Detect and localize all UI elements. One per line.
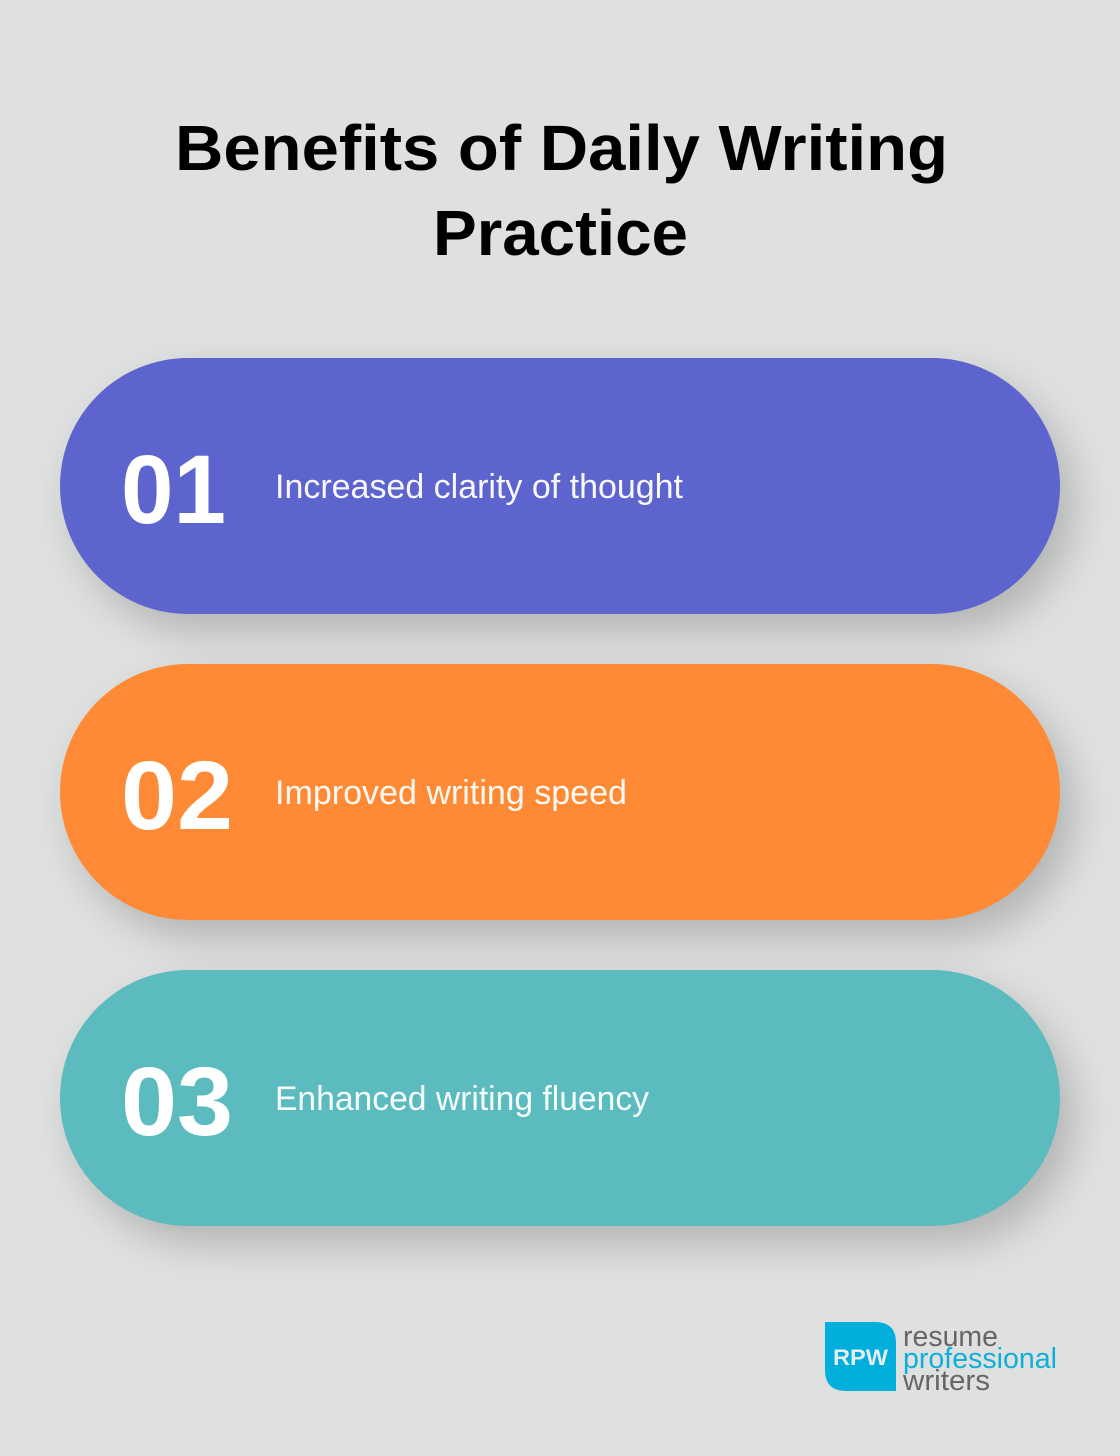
title: Practice [433,197,688,269]
logo: resume professional writers [825,1321,1057,1397]
logo word: writers: writers [902,1365,990,1397]
logo word: professional: professional [903,1343,1057,1375]
benefit 02 text: Improved writing speed [275,774,627,812]
panel: benefit 02 [60,664,1060,920]
logo word: resume: resume [903,1321,998,1353]
panel: benefit 01 [60,358,1060,614]
title: Benefits of Daily Writing [175,112,948,184]
benefit 03 number: 03 [121,1047,233,1156]
logo initials: RPW [833,1345,888,1370]
title [175,112,948,269]
benefit 01 number: 01 [121,435,226,544]
benefit 03 text: Enhanced writing fluency [275,1080,649,1118]
icon: RPW badge [825,1322,896,1391]
benefit 01 text: Increased clarity of thought [275,468,684,506]
benefit 02 number: 02 [121,741,233,850]
panel: benefit 03 [60,970,1060,1226]
